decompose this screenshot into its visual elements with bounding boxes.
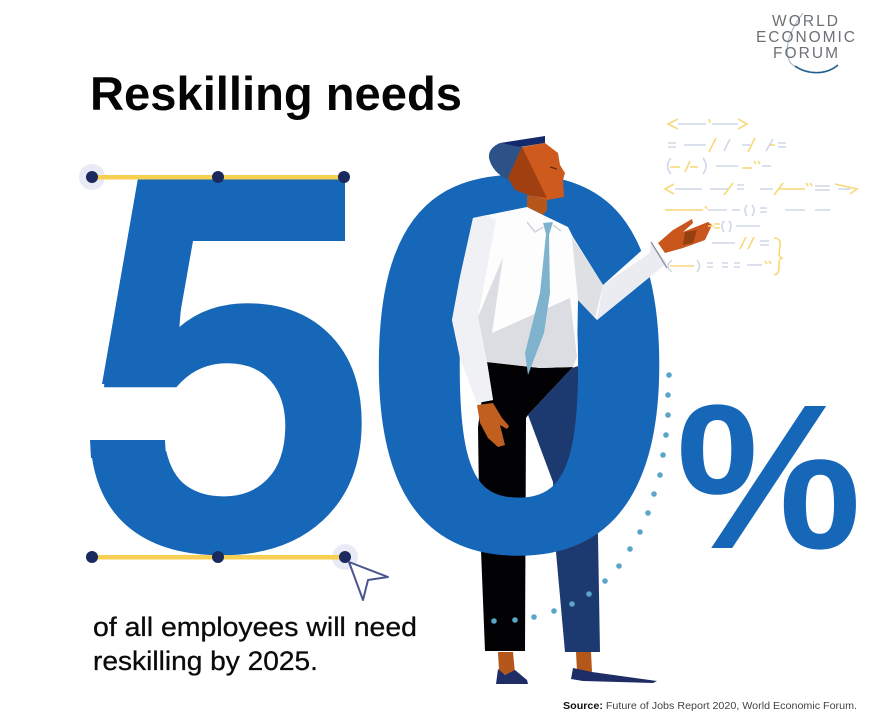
eye bbox=[550, 167, 557, 169]
percent sign: % bbox=[676, 361, 861, 592]
hand shadow bbox=[683, 230, 697, 245]
icon: cursor arrow bbox=[349, 562, 388, 600]
face bbox=[508, 143, 565, 200]
source note: Source: Future of Jobs Report 2020, World Economic Forum. bbox=[563, 700, 857, 712]
tie bbox=[525, 222, 553, 375]
big number 0: 0 bbox=[356, 63, 683, 665]
logo: World Economic Forum: ECONOMIC bbox=[756, 29, 855, 46]
logo: World Economic Forum: FORUM bbox=[773, 45, 838, 62]
hair top bbox=[500, 136, 545, 147]
shirt bbox=[452, 207, 667, 403]
sleeve right shadow bbox=[572, 237, 603, 318]
neck bbox=[527, 195, 547, 215]
shirt shadow bbox=[478, 257, 577, 368]
title: Reskilling needs bbox=[90, 68, 462, 121]
forearm bbox=[597, 242, 667, 320]
top handle line bbox=[79, 164, 350, 190]
hair bbox=[489, 143, 522, 180]
bottom handle line bbox=[86, 544, 358, 570]
caption bbox=[93, 612, 417, 676]
sleeve left bbox=[452, 215, 496, 403]
code snippet lines bbox=[665, 119, 857, 275]
logo: World Economic Forum: WORLD bbox=[772, 13, 838, 30]
man's legs behind the zero bbox=[478, 362, 657, 684]
logo: World Economic Forum bbox=[756, 13, 855, 73]
right hand bbox=[658, 219, 712, 253]
face shadow bbox=[508, 147, 547, 198]
caption: reskilling by 2025. bbox=[93, 646, 318, 676]
big number 5: 5 bbox=[71, 60, 384, 665]
dotted arc bbox=[491, 372, 672, 624]
man's upper body bbox=[452, 136, 712, 447]
caption: of all employees will need bbox=[93, 612, 417, 642]
cuff bbox=[651, 242, 667, 268]
left hand bbox=[477, 403, 509, 447]
collar bbox=[527, 222, 561, 232]
